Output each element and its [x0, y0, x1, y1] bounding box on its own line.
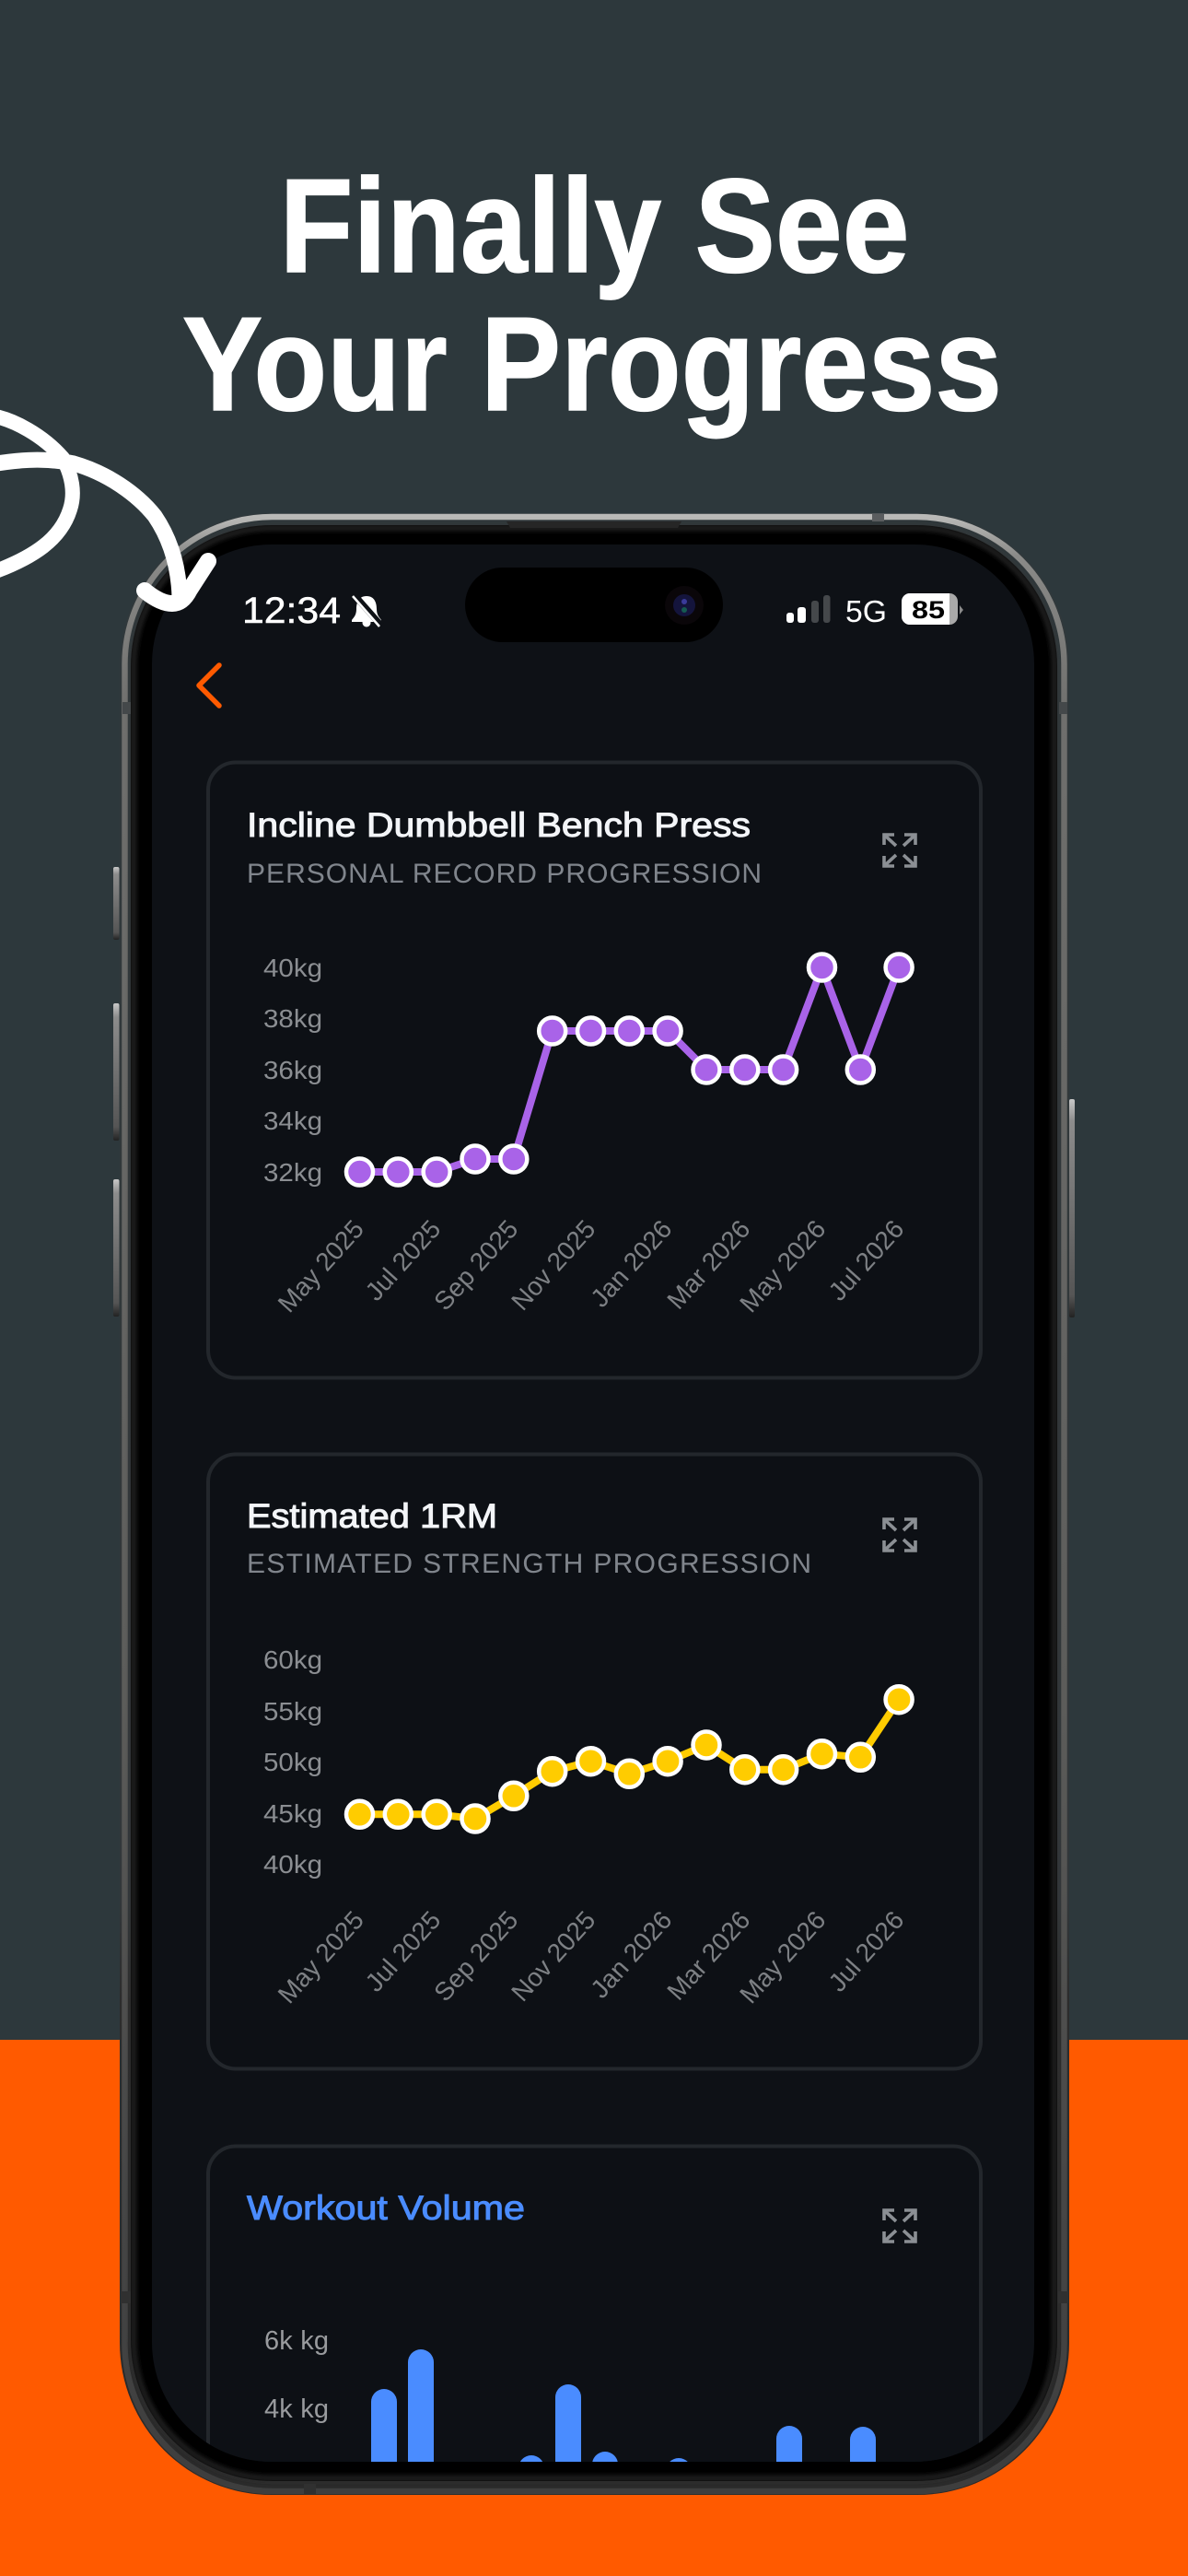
- background: orange lower band: [0, 2040, 1188, 2576]
- line chart: personal record: [346, 954, 913, 1185]
- icon: muted bell: [352, 594, 381, 626]
- heading: Estimated 1RM: [247, 1497, 497, 1535]
- icon: back chevron: [199, 665, 219, 706]
- y axis labels: 55kg: [263, 1697, 322, 1726]
- bar chart: workout volume: [371, 2349, 876, 2462]
- x axis labels: Jul 2025: [360, 1905, 446, 1997]
- background: dark upper section: [0, 0, 1188, 2040]
- subheading: ESTIMATED STRENGTH PROGRESSION: [247, 1549, 811, 1579]
- title: [182, 151, 1002, 439]
- phone side buttons: [113, 867, 1075, 1317]
- icon: signal bars: [786, 595, 831, 623]
- phone mockup: [113, 513, 1075, 2536]
- y axis labels: 34kg: [263, 1107, 322, 1135]
- x axis labels: [273, 1905, 909, 2008]
- icon: battery: [902, 593, 963, 625]
- phone frame: [120, 513, 1069, 2495]
- x axis labels: Jul 2026: [823, 1905, 909, 1997]
- icon: expand: [884, 2210, 915, 2242]
- title: Your Progress: [182, 289, 1002, 439]
- y axis labels: 4k kg: [264, 2395, 329, 2424]
- x axis labels: May 2025: [273, 1905, 369, 2008]
- x axis labels: Mar 2026: [661, 1905, 755, 2006]
- arrow: hand-drawn white scribble: [0, 416, 208, 603]
- panel: workout volume: [206, 2145, 983, 2462]
- icon: battery: 85: [912, 596, 945, 624]
- x axis labels: Nov 2025: [506, 1905, 600, 2007]
- dynamic island: [465, 568, 723, 642]
- x axis labels: May 2025: [273, 1214, 369, 1317]
- x axis labels: Sep 2025: [428, 1214, 523, 1316]
- y axis labels: 36kg: [263, 1056, 322, 1084]
- x axis labels: Mar 2026: [661, 1214, 755, 1315]
- x axis labels: Jan 2026: [585, 1214, 677, 1313]
- line chart: estimated strength: [346, 1686, 913, 1832]
- x axis labels: May 2026: [734, 1214, 831, 1317]
- x axis labels: [273, 1214, 909, 1317]
- icon: expand: [884, 1519, 915, 1551]
- y axis labels: 45kg: [263, 1799, 322, 1828]
- y axis labels: 38kg: [263, 1004, 322, 1033]
- status bar network label: 5G: [845, 594, 887, 628]
- x axis labels: Sep 2025: [428, 1905, 523, 2007]
- heading: Incline Dumbbell Bench Press: [247, 806, 751, 844]
- x axis labels: Jan 2026: [585, 1905, 677, 2004]
- status bar time: 12:34: [242, 591, 341, 631]
- x axis labels: Nov 2025: [506, 1214, 600, 1316]
- y axis labels: 60kg: [263, 1645, 322, 1674]
- title: Finally See: [280, 151, 910, 300]
- y axis labels: 40kg: [263, 1850, 322, 1879]
- screen: [152, 544, 1034, 2536]
- heading: Workout Volume: [247, 2189, 525, 2227]
- x axis labels: May 2026: [734, 1905, 831, 2008]
- panel: estimated 1RM: [208, 1454, 981, 2069]
- subheading: PERSONAL RECORD PROGRESSION: [247, 859, 762, 889]
- x axis labels: Jul 2026: [823, 1214, 909, 1306]
- y axis labels: 50kg: [263, 1748, 322, 1776]
- y axis labels: 40kg: [263, 954, 322, 982]
- y axis labels: [263, 954, 322, 1187]
- icon: expand: [884, 835, 915, 866]
- y axis labels: [264, 2326, 329, 2424]
- y axis labels: 32kg: [263, 1158, 322, 1187]
- x axis labels: Jul 2025: [360, 1214, 446, 1306]
- y axis labels: [263, 1645, 322, 1879]
- y axis labels: 6k kg: [264, 2326, 329, 2356]
- panel: personal record progression: [208, 763, 981, 1378]
